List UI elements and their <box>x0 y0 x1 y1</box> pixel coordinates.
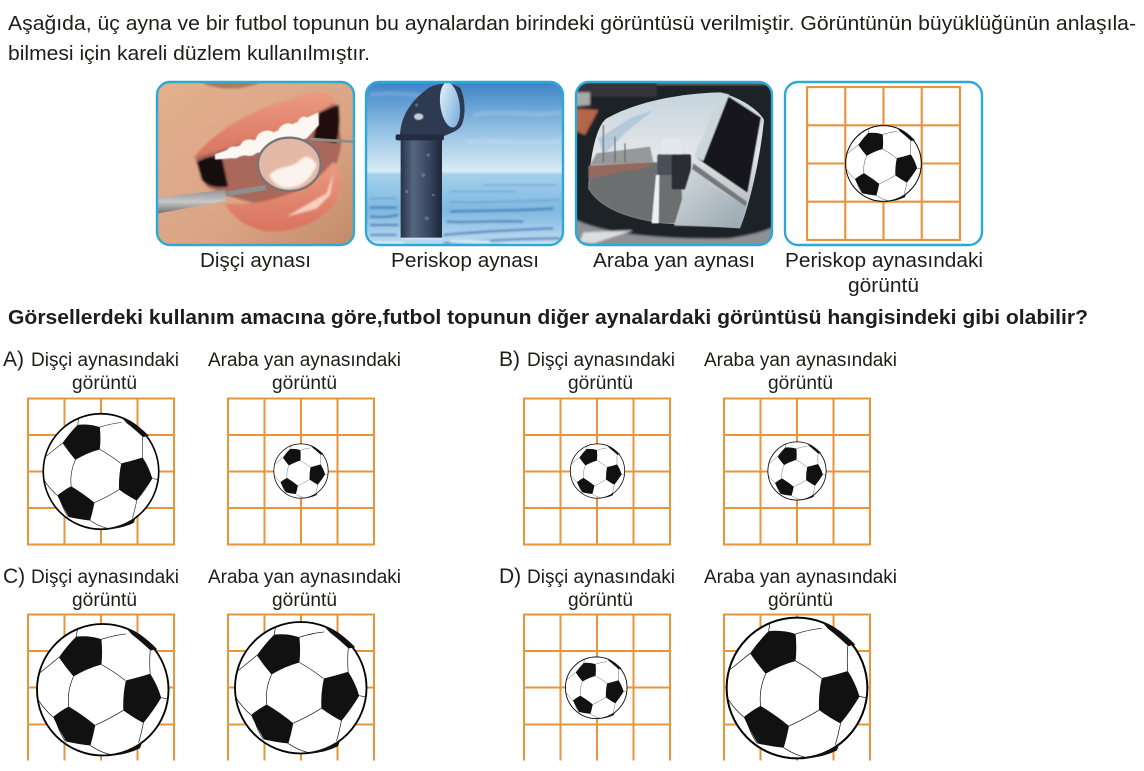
photo captions: Periskop aynasındaki <box>785 249 983 272</box>
option C: görüntü <box>72 590 137 611</box>
option B <box>499 348 897 544</box>
option C: Araba yan aynasındaki <box>208 567 401 588</box>
panel: periscope image grid with ball <box>785 82 982 245</box>
photo: periscope <box>363 81 567 248</box>
option C: C) <box>3 565 25 588</box>
option A <box>3 348 401 544</box>
option D: D) <box>499 565 521 588</box>
option A: görüntü <box>72 373 137 394</box>
option D: görüntü <box>568 590 633 611</box>
option C <box>3 565 401 760</box>
option B: Dişçi aynasındaki <box>527 350 675 371</box>
intro paragraph <box>8 12 1136 65</box>
question heading: Görsellerdeki kullanım amacına göre,futbol topunun diğer aynalardaki görüntüsü hangisindeki gibi olabilir? <box>8 307 1088 329</box>
option B: görüntü <box>768 373 833 394</box>
option A: Araba yan aynasındaki <box>208 350 401 371</box>
photo: dentist mirror <box>156 80 356 246</box>
option A: görüntü <box>272 373 337 394</box>
option D: Araba yan aynasındaki <box>704 567 897 588</box>
option C: Dişçi aynasındaki <box>31 567 179 588</box>
teeth <box>215 112 319 160</box>
option B: B) <box>499 348 520 371</box>
option D: Dişçi aynasındaki <box>527 567 675 588</box>
photo captions: Araba yan aynası <box>593 249 755 272</box>
option D <box>499 565 897 760</box>
photo captions: Dişçi aynası <box>200 249 311 272</box>
option B: görüntü <box>568 373 633 394</box>
option C: görüntü <box>272 590 337 611</box>
option A: A) <box>3 348 24 371</box>
photo captions <box>200 249 983 297</box>
photo: car side mirror <box>573 78 777 248</box>
option A: Dişçi aynasındaki <box>31 350 179 371</box>
option D: görüntü <box>768 590 833 611</box>
option B: Araba yan aynasındaki <box>704 350 897 371</box>
photo captions: Periskop aynası <box>391 249 539 272</box>
intro paragraph: Aşağıda, üç ayna ve bir futbol topunun bu aynalardan birindeki görüntüsü verilmiştir. Görüntünün büyüklüğünün anlaşıla- <box>8 12 1136 35</box>
photo captions: görüntü <box>848 274 919 297</box>
intro paragraph: bilmesi için kareli düzlem kullanılmıştır. <box>8 42 370 65</box>
